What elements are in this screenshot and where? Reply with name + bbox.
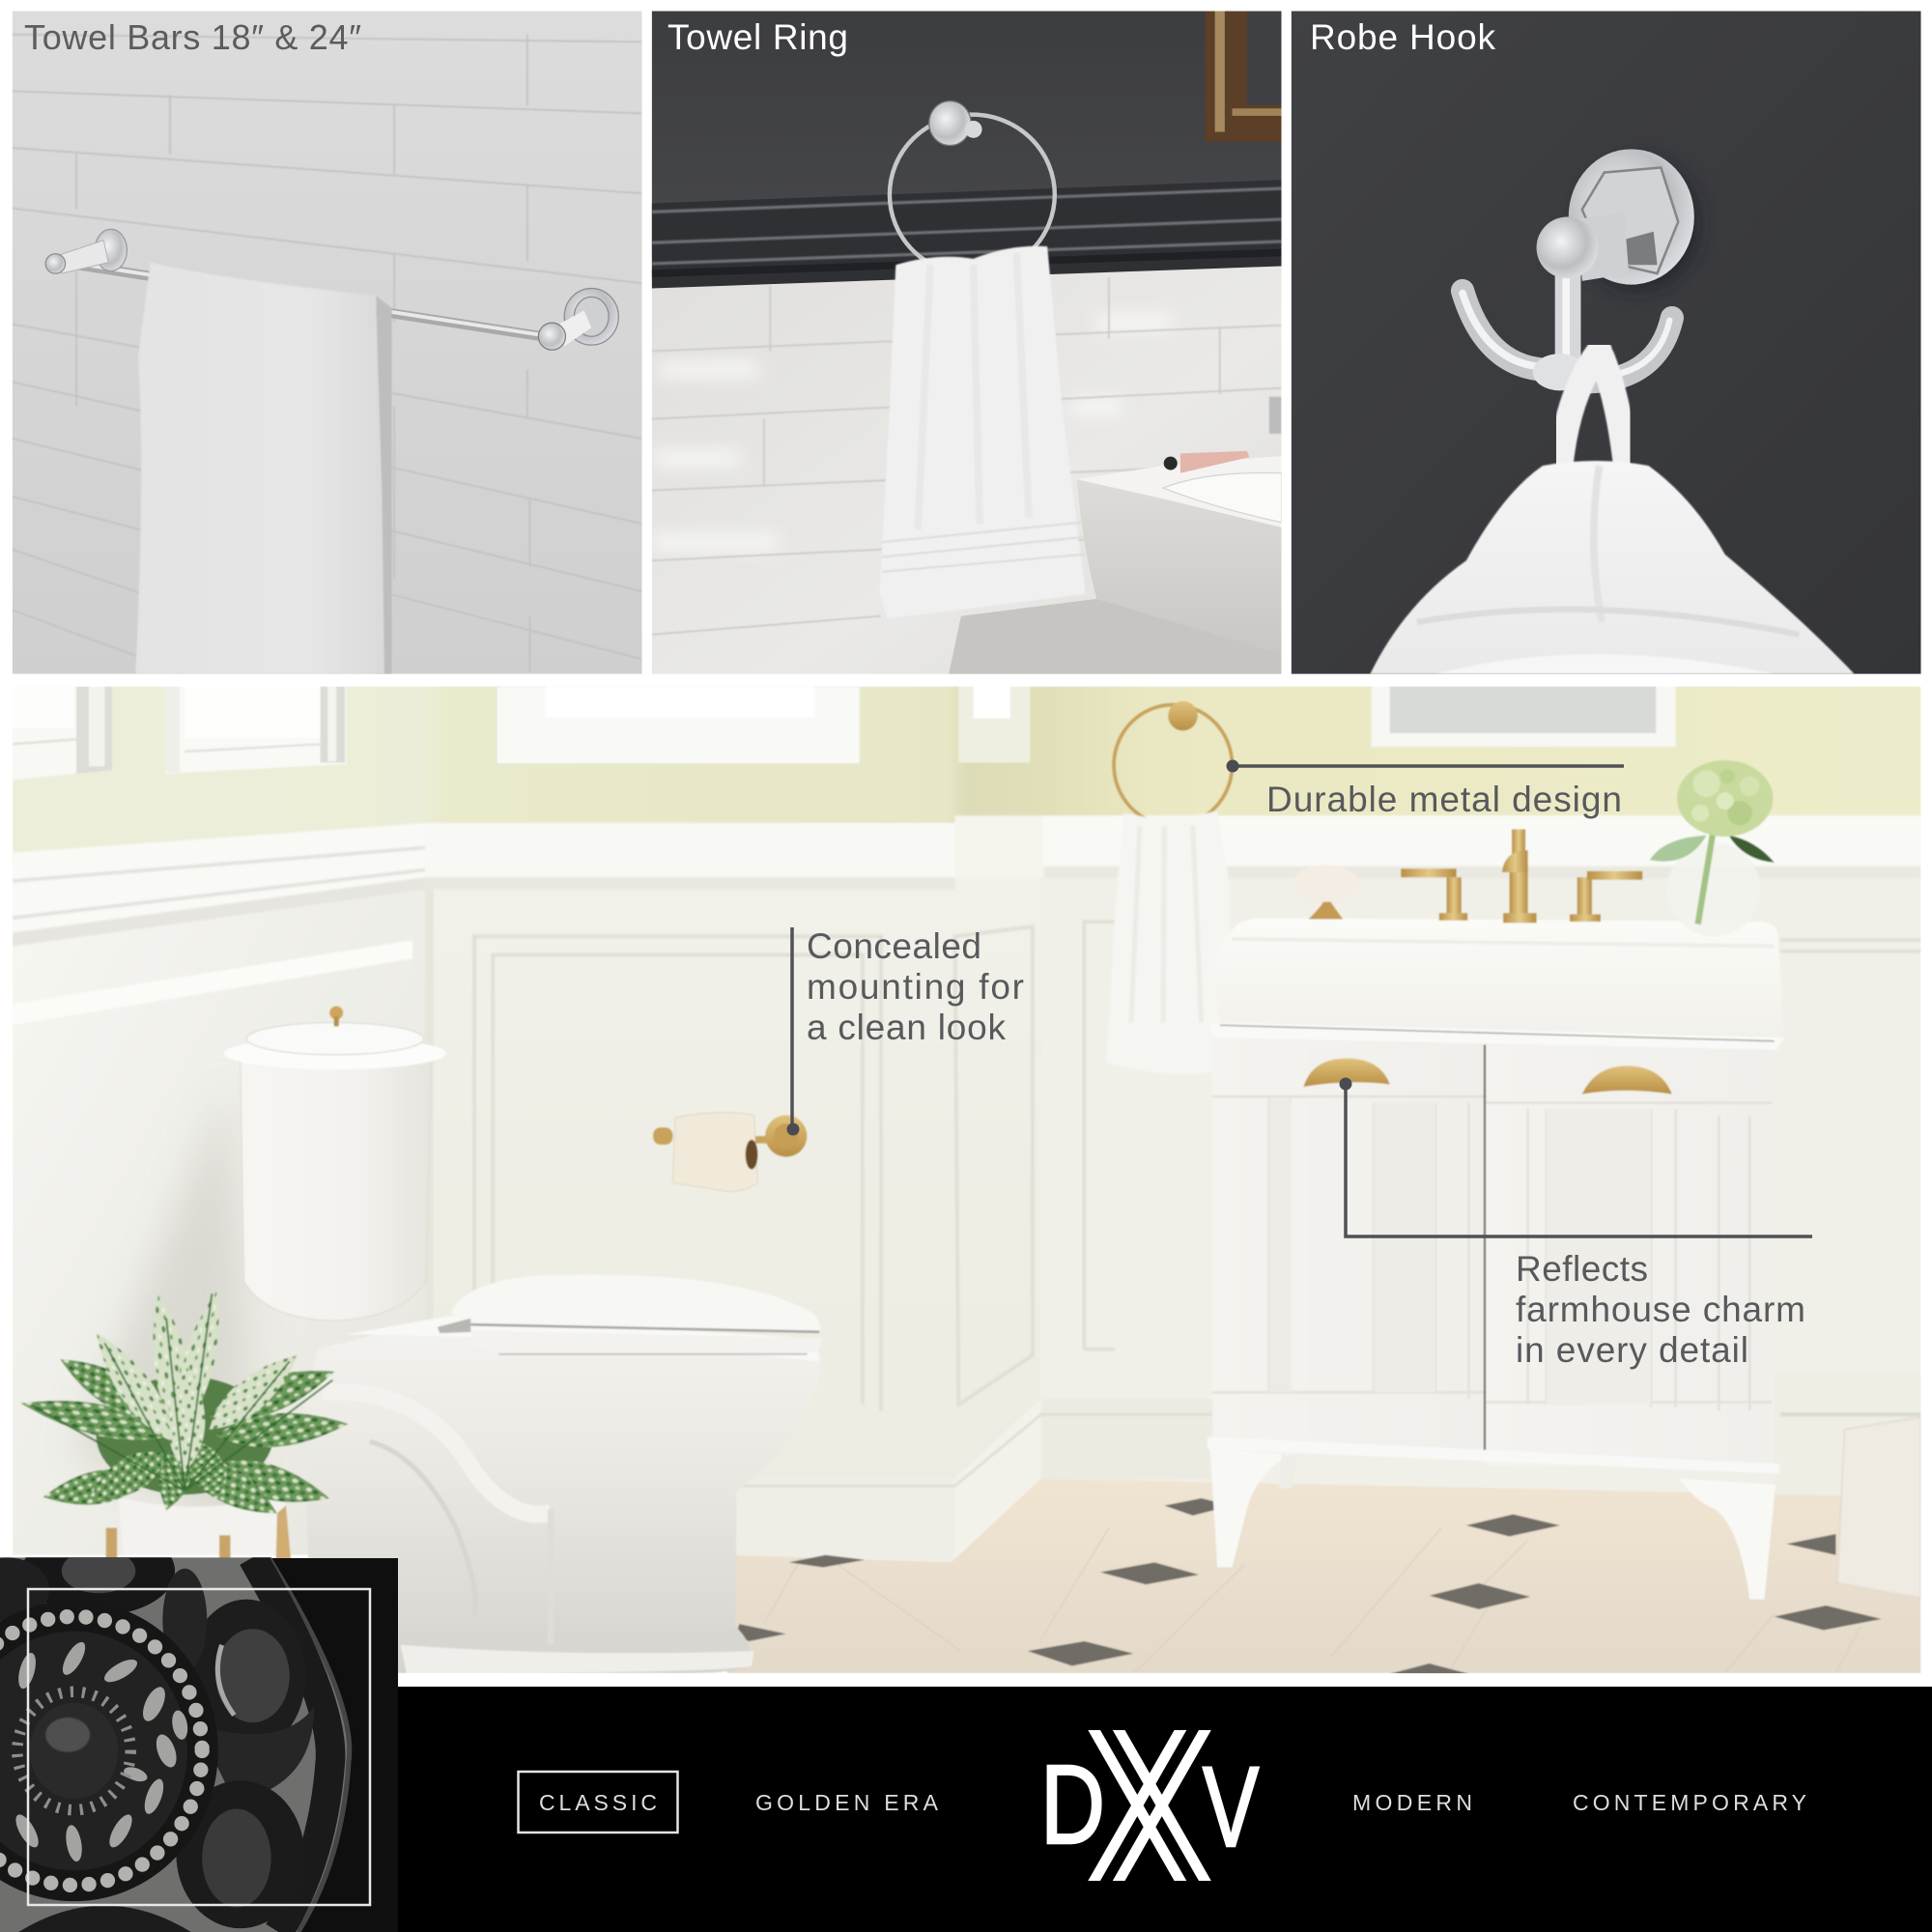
footer tab: contemporary: CONTEMPORARY: [1573, 1790, 1806, 1815]
callout: farmhouse charm: farmhouse charm: [1516, 1290, 1805, 1329]
wall tile highlights: [653, 323, 1171, 542]
left bracket: [45, 229, 127, 273]
footer bar: [398, 1687, 1932, 1932]
floor diamonds: [735, 1498, 1882, 1676]
baseboards: [727, 1374, 1922, 1565]
logo: DXV: D: [1040, 1743, 1105, 1867]
sink: [1077, 456, 1282, 654]
rosettes: [0, 1526, 314, 1932]
logo: DXV: V: [1203, 1743, 1259, 1870]
faucet fragment: [1269, 397, 1282, 434]
hand towel: [1106, 810, 1230, 1074]
towel: [135, 263, 384, 674]
ring mount: [929, 101, 982, 146]
callout: farmhouse charm: in every detail: [1516, 1330, 1748, 1370]
panel: towel ring photo: [652, 11, 1282, 674]
callout: farmhouse charm: Reflects: [1516, 1249, 1648, 1289]
flower vase: [1650, 760, 1775, 936]
knob and stem: [1537, 212, 1629, 363]
footer tab: classic: CLASSIC: [539, 1790, 657, 1815]
hook arms: [1463, 291, 1672, 390]
callout: durable metal design: Durable metal design: [1266, 780, 1622, 819]
corner shading: [425, 890, 434, 1528]
upper wall: [12, 686, 1920, 854]
faucet: [1401, 829, 1642, 923]
dark moulding: [652, 180, 1282, 288]
callout: concealed mounting: a clean look: [807, 1008, 1007, 1047]
inner petals: [0, 1632, 189, 1870]
ornament inner frame: [28, 1589, 370, 1905]
hook flange: [1569, 149, 1700, 291]
robe body: [1370, 461, 1855, 674]
hand towel: [880, 246, 1086, 618]
vanity cabinet: [1208, 1037, 1779, 1600]
toilet bowl: [305, 1316, 822, 1673]
panel: robe hook photo: [1292, 11, 1921, 674]
robe loops: [1560, 352, 1627, 469]
floor: [727, 1479, 1921, 1673]
soap knob: [1293, 865, 1359, 920]
middle wainscot: [433, 876, 1041, 1479]
panel: bathroom scene photo: [13, 686, 1922, 1676]
callout: concealed mounting: [786, 926, 1024, 1136]
left wainscot: [13, 823, 425, 1555]
right bracket: [538, 288, 618, 350]
beadboard grooves: [1212, 1096, 1772, 1410]
vanity sink: [1210, 918, 1784, 1050]
label: towel bars: Towel Bars 18″ & 24″: [24, 17, 361, 57]
toilet shadow on wall: [74, 1084, 246, 1528]
ornament background panel: [0, 1558, 398, 1932]
tile joints: [13, 35, 642, 674]
toilet seat: [438, 1274, 821, 1354]
waste bin: [1837, 1417, 1921, 1598]
towel bar rod: [62, 261, 542, 336]
toilet tank: [224, 1006, 446, 1321]
wall panel mouldings: [474, 922, 1921, 1417]
footer tab: classic: [518, 1772, 678, 1833]
towel shadow: [376, 296, 392, 674]
label: robe hook: Robe Hook: [1310, 17, 1495, 57]
wall tiles: [652, 277, 1282, 635]
panel: towel bars photo: [13, 11, 642, 674]
central dome: [30, 1703, 118, 1799]
plant: [17, 1286, 350, 1528]
plant pot: [106, 1493, 291, 1560]
ornamental medallion: [0, 1526, 350, 1932]
label: towel ring: Towel Ring: [668, 17, 848, 57]
chair rails: [13, 815, 1921, 1025]
pink tube: [1164, 451, 1249, 473]
towel ring: [890, 115, 1055, 274]
callout: concealed mounting: mounting for: [807, 967, 1024, 1007]
callout: concealed mounting: Concealed: [807, 926, 981, 966]
bead ring: [0, 1616, 202, 1886]
medallion disc: [0, 1557, 350, 1932]
mirror frame: [1205, 11, 1282, 142]
callout: farmhouse charm: [1339, 1078, 1812, 1370]
floor: [949, 599, 1282, 674]
toilet: [224, 1006, 822, 1673]
toilet paper holder: [653, 1113, 807, 1192]
cabinet pulls: [1303, 1059, 1672, 1094]
towel ring gold: [1114, 701, 1233, 826]
logo: DXV: [1040, 1730, 1259, 1881]
footer tab: golden era: GOLDEN ERA: [755, 1790, 939, 1815]
callout: durable metal design: [1227, 759, 1624, 819]
window frames: [13, 686, 1676, 780]
footer tab: modern: MODERN: [1352, 1790, 1472, 1815]
right wainscot: [1041, 877, 1920, 1492]
